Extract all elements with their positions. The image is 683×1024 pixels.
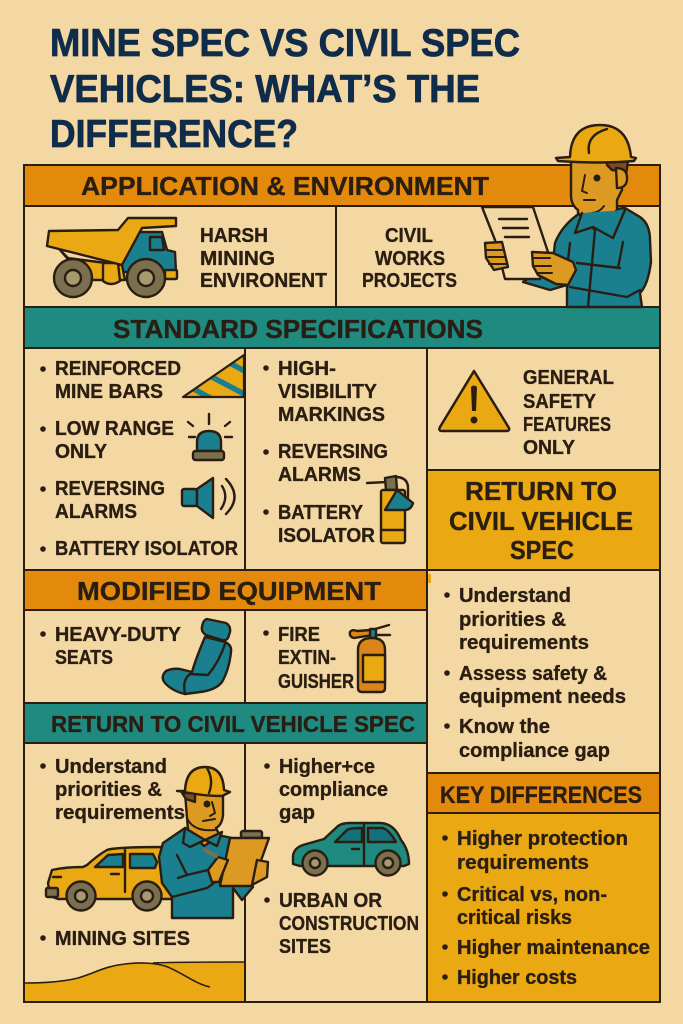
bullets: key differences: Higher maintenance <box>457 936 650 959</box>
bullets: understand priorities: priorities & <box>55 778 162 801</box>
heading: return to civil vehicle spec: RETURN TO <box>465 476 617 506</box>
bullet: mining sites: MINING SITES <box>55 927 190 950</box>
bullets: return steps: requirements <box>459 631 589 654</box>
bullets: civil standard specifications: ALARMS <box>278 463 361 486</box>
bullets: fire extinguisher: EXTIN- <box>278 646 336 669</box>
bullets: mine standard specifications: BATTERY ISOLATOR <box>55 537 238 560</box>
bullets: return steps: Know the <box>459 715 550 738</box>
bullets: higher compliance gap: compliance <box>279 778 388 801</box>
text: civil works projects: CIVIL <box>385 224 433 247</box>
bullets: mine standard specifications <box>40 357 238 560</box>
text: civil works projects: WORKS <box>375 247 445 270</box>
icon: worker with clipboard <box>482 125 651 307</box>
bullets: return steps <box>444 584 626 762</box>
bullets: urban or construction sites: SITES <box>279 935 331 958</box>
bullets: understand priorities: Understand <box>55 755 167 778</box>
bullets: mine standard specifications: ONLY <box>55 440 107 463</box>
bullets: key differences <box>442 827 650 989</box>
heading: application and environment: APPLICATION & ENVIRONMENT <box>81 171 489 201</box>
bullets: civil standard specifications <box>263 357 388 547</box>
text: harsh mining environment: HARSH <box>200 224 268 247</box>
worker face <box>185 793 223 846</box>
text: general safety features only <box>523 366 614 459</box>
bullets: mine standard specifications: ALARMS <box>55 500 137 523</box>
bullets: key differences: critical risks <box>457 906 572 929</box>
bullets: heavy-duty seats: HEAVY-DUTY <box>55 623 181 646</box>
bullets: civil standard specifications: REVERSING <box>278 440 388 463</box>
bullets: key differences: requirements <box>457 851 589 874</box>
bullets: fire extinguisher: GUISHER <box>278 670 354 693</box>
text: civil works projects: PROJECTS <box>362 269 457 292</box>
bullets: return steps: priorities & <box>459 608 566 631</box>
heading: key differences: KEY DIFFERENCES <box>440 782 642 809</box>
clipboard paper <box>482 207 548 279</box>
heading: return to civil vehicle spec <box>449 476 633 565</box>
bullets: return steps: equipment needs <box>459 685 626 708</box>
icon: seat <box>163 619 231 694</box>
text: general safety features only: SAFETY <box>523 390 596 413</box>
worker hard hat <box>177 767 230 796</box>
title <box>50 22 520 156</box>
panel: table background <box>24 165 660 1002</box>
text: harsh mining environment: ENVIRONENT <box>200 269 327 292</box>
bullets: mine standard specifications: MINE BARS <box>55 380 163 403</box>
icon: dump truck <box>47 218 177 297</box>
text: harsh mining environment <box>200 224 327 292</box>
bullets: mine standard specifications: REINFORCED <box>55 357 181 380</box>
bullets: return steps: Assess safety & <box>459 662 607 685</box>
worker hands and pen <box>208 857 228 882</box>
text: harsh mining environment: MINING <box>200 247 275 270</box>
bullets: understand priorities <box>40 755 185 824</box>
bullets: civil standard specifications: BATTERY <box>278 501 363 524</box>
bullets: heavy-duty seats: SEATS <box>55 646 113 669</box>
title: DIFFERENCE? <box>50 113 298 156</box>
heading: return to civil vehicle spec: SPEC <box>510 535 574 565</box>
heading: standard specifications: STANDARD SPECIFICATIONS <box>113 314 483 344</box>
bullets: civil standard specifications: VISIBILITY <box>278 380 377 403</box>
bullets: urban or construction sites <box>264 889 419 958</box>
bullets: return steps: compliance gap <box>459 739 610 762</box>
icon: speaker <box>182 478 234 518</box>
icon: beacon light <box>188 414 232 460</box>
text: general safety features only: ONLY <box>523 436 575 459</box>
bullets: mine standard specifications: LOW RANGE <box>55 417 174 440</box>
icon: yellow car <box>46 847 172 910</box>
worker neck and face <box>571 160 622 230</box>
bullets: higher compliance gap: gap <box>279 801 315 824</box>
bullets: urban or construction sites: CONSTRUCTION <box>279 912 419 935</box>
bullets: understand priorities: requirements <box>55 801 185 824</box>
icon: small extinguisher <box>367 476 413 543</box>
text: general safety features only: GENERAL <box>523 366 614 389</box>
bullets: key differences: Higher protection <box>457 827 628 850</box>
worker hands <box>485 242 508 270</box>
heading: return to civil vehicle spec bar: RETURN TO CIVIL VEHICLE SPEC <box>51 711 415 737</box>
text: general safety features only: FEATURES <box>523 413 611 436</box>
heading: modified equipment: MODIFIED EQUIPMENT <box>77 576 381 606</box>
icon: fire extinguisher <box>350 625 390 692</box>
bullets: mine standard specifications: REVERSING <box>55 477 165 500</box>
bullets: heavy-duty seats <box>40 623 181 669</box>
bullets: key differences: Critical vs, non- <box>457 883 607 906</box>
title: MINE SPEC VS CIVIL SPEC <box>50 22 520 65</box>
icon: warning triangle <box>439 371 509 431</box>
bullets: key differences: Higher costs <box>457 966 577 989</box>
worker body <box>523 208 651 307</box>
bullets: higher compliance gap <box>264 755 388 824</box>
icon: worker writing on clipboard <box>159 767 269 918</box>
bullets: fire extinguisher: FIRE <box>278 623 320 646</box>
bullets: urban or construction sites: URBAN OR <box>279 889 382 912</box>
bullets: civil standard specifications: ISOLATOR <box>278 524 375 547</box>
title: VEHICLES: WHAT’S THE <box>50 68 480 111</box>
worker hard hat <box>556 125 636 162</box>
clipboard <box>241 831 262 838</box>
worker body <box>159 828 253 918</box>
text: civil works projects <box>362 224 457 292</box>
bullets: higher compliance gap: Higher+ce <box>279 755 375 778</box>
bullets: fire extinguisher <box>263 623 354 693</box>
icon: hazard striped flag <box>183 355 250 400</box>
heading: return to civil vehicle spec: CIVIL VEHICLE <box>449 506 633 536</box>
bullets: return steps: Understand <box>459 584 571 607</box>
bullets: civil standard specifications: HIGH- <box>278 357 336 380</box>
icon: teal car <box>293 823 409 876</box>
bullets: civil standard specifications: MARKINGS <box>278 403 385 426</box>
